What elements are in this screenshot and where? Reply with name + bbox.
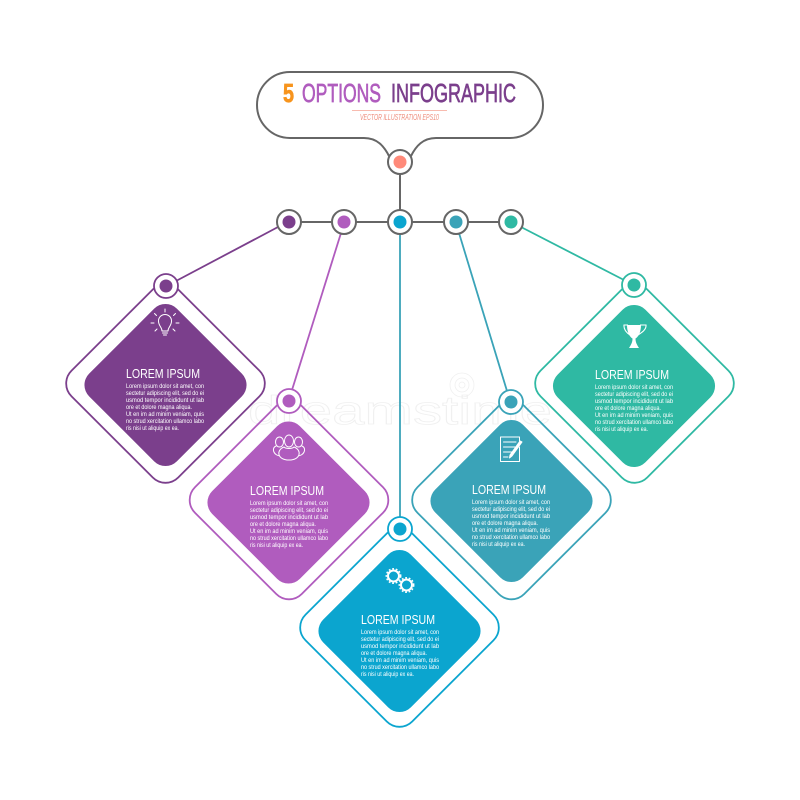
body text: ore et dolore magna aliqua. [595,405,661,412]
body text: Ut en im ad minim veniam, quis [250,528,328,535]
body text: no strud xercitation ullamco labo [250,535,328,542]
body text: ore et dolore magna aliqua. [361,650,427,657]
watermark [248,373,552,433]
title: 5 [283,78,294,108]
body text: Lorem ipsum dolor sit amet, con [361,629,439,636]
icon: light bulb [151,309,179,335]
hub node [388,150,412,174]
panel: option 2 [182,389,396,607]
body text: ris nisi ut aliquip ex ea. [361,671,414,678]
heading: LOREM IPSUM [595,368,669,382]
body text: sectetur adipiscing elit, sed do ei [250,507,328,514]
body text [250,500,329,549]
callout outline [257,72,543,156]
body text: Ut en im ad minim veniam, quis [126,411,204,418]
title [283,78,516,108]
body text: Lorem ipsum dolor sit amet, con [595,384,673,391]
panel: option 1 [59,274,272,490]
body text: sectetur adipiscing elit, sed do ei [126,390,204,397]
body text: Lorem ipsum dolor sit amet, con [250,500,328,507]
body text: no strud xercitation ullamco labo [126,418,204,425]
panel: option 4 [405,390,618,607]
icon: gears [386,569,414,592]
connector lines to options [176,227,624,518]
body text: sectetur adipiscing elit, sed do ei [595,391,673,398]
body text [361,629,440,678]
body text: no strud xercitation ullamco labo [472,534,550,541]
body text: sectetur adipiscing elit, sed do ei [472,506,550,513]
icon: trophy [624,325,646,348]
body text: Lorem ipsum dolor sit amet, con [472,499,550,506]
body text: Ut en im ad minim veniam, quis [595,412,673,419]
body text [595,384,674,433]
option nodes row [277,210,523,234]
icon: document with pen [500,437,522,462]
body text: ris nisi ut aliquip ex ea. [250,542,303,549]
body text: ris nisi ut aliquip ex ea. [595,426,648,433]
connector: hub to option row [289,174,511,222]
body text: ris nisi ut aliquip ex ea. [126,425,179,432]
body text: usmod tempor incididunt ut lab [595,398,674,405]
body text: ore et dolore magna aliqua. [472,520,538,527]
heading: LOREM IPSUM [361,613,435,627]
title callout [257,72,543,156]
body text: no strud xercitation ullamco labo [361,664,439,671]
body text: no strud xercitation ullamco labo [595,419,673,426]
panel: option 5 [528,273,741,490]
body text: usmod tempor incididunt ut lab [361,643,440,650]
heading: LOREM IPSUM [126,367,200,381]
heading: LOREM IPSUM [250,484,324,498]
body text: ore et dolore magna aliqua. [126,404,192,411]
title: OPTIONS [302,78,381,108]
body text: usmod tempor incididunt ut lab [126,397,205,404]
icon: group of people [273,435,305,460]
body text: ore et dolore magna aliqua. [250,521,316,528]
heading: LOREM IPSUM [472,483,546,497]
title: INFOGRAPHIC [391,78,516,108]
body text [126,383,205,432]
body text: Ut en im ad minim veniam, quis [472,527,550,534]
panel: option 3 [293,517,506,734]
watermark: dreamstime [248,389,552,433]
body text: usmod tempor incididunt ut lab [250,514,329,521]
body text: ris nisi ut aliquip ex ea. [472,541,525,548]
body text: Ut en im ad minim veniam, quis [361,657,439,664]
body text: sectetur adipiscing elit, sed do ei [361,636,439,643]
subtitle [352,110,447,122]
body text: usmod tempor incididunt ut lab [472,513,551,520]
subtitle: VECTOR ILLUSTRATION EPS10 [360,113,439,122]
body text: Lorem ipsum dolor sit amet, con [126,383,204,390]
body text [472,499,551,548]
